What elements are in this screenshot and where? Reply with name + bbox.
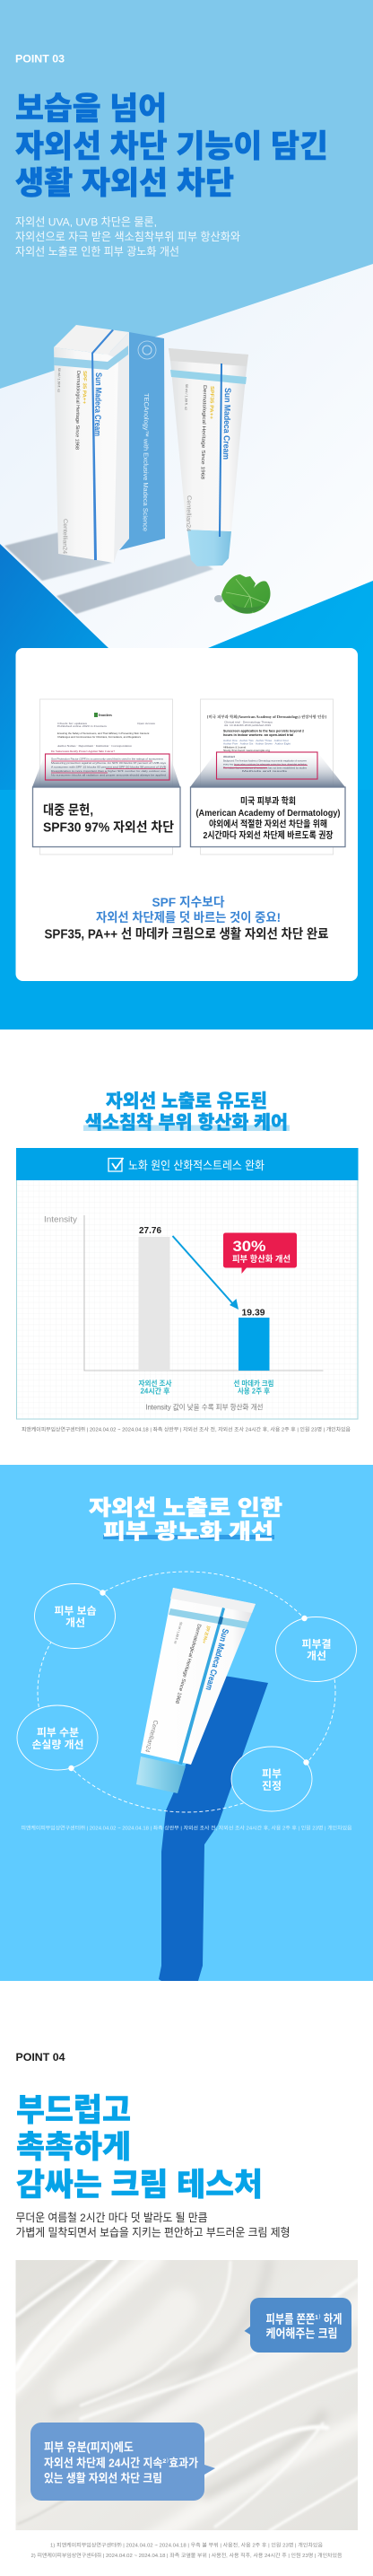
chart header: 노화 원인 산화적스트레스 완화 bbox=[128, 1159, 265, 1172]
bar chart bbox=[44, 1215, 323, 1411]
heading: 피부 광노화 개선 bbox=[103, 1520, 273, 1543]
zoom callout left highlight: No sunscreen blocks all radiation and proper amounts should always be applied bbox=[51, 774, 167, 777]
image: cream texture bbox=[16, 2260, 358, 2530]
document: AAD paper: Author One · Author Two · Author Three · Author Four bbox=[223, 739, 289, 742]
label: point 03: POINT 03 bbox=[15, 52, 65, 65]
description: 가볍게 밀착되면서 보습을 지키는 편안하고 부드러운 크림 제형 bbox=[16, 2226, 291, 2239]
product: tube: Centellian24 bbox=[185, 495, 192, 531]
heading: 자외선 노출로 인한 bbox=[89, 1495, 282, 1519]
footnote: 피앤케이피부임상연구센터㈜ | 2024.04.02 ~ 2024.04.18 | 좌측 상완부 | 자외선 조사 전, 자외선 조사 24시간 후, 사용 2주 후 | 인원 23명 | 개인차있음 bbox=[22, 1824, 351, 1831]
benefit: water loss: 손실량 개선 bbox=[32, 1739, 84, 1750]
callout: American Academy of Dermatology: (American Academy of Dermatology) bbox=[195, 809, 341, 819]
heading: 색소침착 부위 항산화 케어 bbox=[85, 1113, 288, 1133]
bar: after bbox=[239, 1309, 269, 1371]
document: frontiers paper: Check for updates bbox=[57, 722, 88, 725]
callout: 30% improvement bbox=[223, 1233, 297, 1274]
zoom callout right highlight: every two hours when outdoors for adequate protection from ultraviolet radiation bbox=[223, 763, 307, 767]
bar labels: 선 마데카 크림 bbox=[233, 1379, 274, 1388]
description: 자외선 노출로 인한 피부 광노화 개선 bbox=[15, 246, 179, 258]
callout: SPF30 97%: 대중 문헌, bbox=[43, 802, 93, 819]
footnotes bbox=[30, 2542, 343, 2559]
document: frontiers paper: Open Access bbox=[137, 722, 156, 725]
callout: 30% improvement: 30% bbox=[233, 1239, 266, 1255]
callout: 24 hour sun protection bbox=[30, 2423, 215, 2501]
chart header bbox=[16, 1148, 359, 1180]
document: frontiers paper: frontiers bbox=[99, 713, 112, 717]
product: tilted tube: SPF 35 PA++ bbox=[200, 1625, 211, 1644]
zoom callout right highlight: The indoor face persistence of sunscreen has not been established by studies bbox=[223, 767, 308, 770]
document: AAD paper: Clinical trial · Dermatology Therapy bbox=[224, 720, 273, 723]
callout: 24 hour sun protection: 자외선 차단제 24시간 지속²⁾효과가 bbox=[44, 2456, 198, 2470]
product: tube: Sun Madeca Cream bbox=[221, 388, 232, 460]
section: photoaging improvement bbox=[0, 1465, 373, 1981]
document: frontiers paper: Do Sunscreens Really Protect Against Skin Cancer? bbox=[51, 749, 116, 753]
headline bbox=[15, 92, 328, 201]
bar: before: 27.76 bbox=[139, 1226, 161, 1236]
document: AAD paper: Study first-hand: www.example.org bbox=[223, 749, 271, 752]
headline: 촉촉하게 bbox=[16, 2130, 131, 2165]
product: tube bbox=[169, 348, 248, 566]
product: carton box: TECAnology™ with Exclusive Madeca Science bbox=[142, 393, 151, 531]
callout: American Academy of Dermatology: 미국 피부과 학회 bbox=[240, 795, 296, 807]
document: AAD paper bbox=[201, 699, 334, 854]
document: frontiers paper bbox=[39, 699, 172, 854]
product: tube: 50 ml / 1.69 fl. oz bbox=[184, 384, 188, 410]
zoom callout right highlight: Background: The American Academy of Dermatology recommends reapplication of sunscreen bbox=[223, 759, 307, 763]
product: tilted tube: Centellian24 bbox=[143, 1719, 159, 1753]
section: point 03 hero bbox=[0, 0, 373, 1030]
zoom callout right highlight: Abstract bbox=[223, 755, 235, 758]
headline: 보습을 넘어 bbox=[15, 92, 167, 127]
benefit: skin texture bbox=[276, 1616, 357, 1682]
footnotes: 1) 피앤케이피부임상연구센터㈜ | 2024.04.02 ~ 2024.04.18 | 우측 볼 부위 | 사용전, 사용 2주 후 | 인원 23명 | 개인차있음 bbox=[50, 2542, 324, 2549]
callout: firm skin care: 케어해주는 크림 bbox=[265, 2326, 337, 2341]
headline: 자외선 차단 기능이 담긴 bbox=[15, 129, 328, 164]
arrow: decrease bbox=[172, 1236, 239, 1310]
description: 자외선으로 자극 받은 색소침착부위 피부 항산화와 bbox=[15, 231, 240, 243]
zoom callout left highlight: Reapplication is more important than a higher SPF number for daily outdoor use bbox=[51, 769, 167, 773]
callout: SPF30 97%: SPF30 97% 자외선 차단 bbox=[43, 820, 174, 835]
document: AAD paper: [미국 피부과 학회(American Academy of Dermatology) 권장사항 인용] bbox=[207, 714, 326, 719]
footnote: 피앤케이피부임상연구센터㈜ | 2024.04.02 ~ 2024.04.18 | 좌측 상완부 | 자외선 조사 전, 자외선 조사 24시간 후, 사용 2주 후 | 인원 23명 | 개인차있음 bbox=[22, 1425, 351, 1433]
heading bbox=[89, 1495, 282, 1543]
benefit: moisturizing bbox=[34, 1583, 115, 1648]
benefit: moisturizing: 개선 bbox=[65, 1617, 85, 1628]
callout: SPF30 97% bbox=[32, 787, 180, 847]
benefit: soothing: 피부 bbox=[262, 1768, 282, 1780]
benefit: skin texture: 개선 bbox=[307, 1650, 326, 1662]
conclusion text: 자외선 차단제를 덧 바르는 것이 중요! bbox=[96, 910, 281, 924]
panel: chart frame bbox=[16, 1148, 359, 1419]
benefit: water loss bbox=[17, 1705, 98, 1771]
callout: firm skin care bbox=[244, 2298, 351, 2353]
product: tilted tube: 50 ml / 1.69 fl. oz bbox=[173, 1622, 183, 1644]
bar labels: 24시간 후 bbox=[140, 1386, 170, 1395]
bar chart: Intensity bbox=[44, 1215, 77, 1224]
product: carton box: Sun Madeca Cream bbox=[92, 372, 103, 436]
zoom callout left highlight: Sun Protection Factor (SPF) is a commonly used that is used in the ratings of sunscreens bbox=[51, 758, 164, 761]
product: carton box: Dermatological Heritage Since 1968 bbox=[74, 371, 81, 450]
document: AAD paper: Sunscreen application to the face persists beyond 2 bbox=[223, 729, 304, 732]
callout: 24 hour sun protection: 피부 유분(피지)에도 bbox=[44, 2440, 134, 2454]
benefit cycle diagram bbox=[17, 1572, 357, 1812]
document: frontiers paper: Ensuring the Safety of Sunscreens, and Their Efficacy in Preventing Skin Cancers: bbox=[57, 732, 150, 735]
bar labels bbox=[138, 1379, 274, 1395]
description bbox=[16, 2212, 291, 2239]
zoom callout left highlight: A sunscreen with SPF 15 blocks 93 percent and SPF 50 blocks 98 percent of UVB bbox=[51, 765, 166, 768]
floor shadows bbox=[4, 532, 213, 614]
product: carton box: Centellian24 bbox=[61, 519, 68, 554]
conclusion text: SPF35, PA++ 선 마데카 크림으로 생활 자외선 차단 완료 bbox=[45, 926, 328, 942]
callout: American Academy of Dermatology: 2시간마다 자외선 차단제 바르도록 권장 bbox=[203, 829, 334, 841]
benefit: skin texture: 피부결 bbox=[301, 1639, 332, 1650]
product: tilted tube: Sun Madeca Cream bbox=[204, 1627, 230, 1691]
product: tilted tube: Dermatological Heritage Since 1968 bbox=[174, 1623, 202, 1704]
headline bbox=[16, 2093, 263, 2203]
benefit: water loss: 피부 수분 bbox=[37, 1727, 79, 1739]
footnotes: 2) 피앤케이피부임상연구센터㈜ | 2024.04.02 ~ 2024.04.18 | 좌측 코옆볼 부위 | 사용전, 사용 직후, 사용 24시간 후 | 인원 23명 | 개인차있음 bbox=[30, 2552, 343, 2559]
product: carton box: SPF 35 PA++ bbox=[81, 371, 87, 404]
description bbox=[15, 215, 240, 258]
chart note: Intensity 값이 낮을 수록 피부 항산화 개선 bbox=[145, 1402, 264, 1411]
document: AAD paper: Affiliations & Journal bbox=[223, 745, 246, 749]
document: frontiers paper: Published online 2023 in Frontiers bbox=[57, 724, 108, 728]
document: frontiers paper: Author Names · Department · Institution · Correspondence bbox=[57, 745, 133, 748]
bar labels: 사용 2주 후 bbox=[238, 1386, 270, 1395]
bar: before bbox=[138, 1226, 170, 1371]
heading bbox=[85, 1091, 288, 1133]
product: carton box: 50 ml / 1.69 fl. oz bbox=[57, 368, 61, 392]
headline: 부드럽고 bbox=[16, 2093, 131, 2128]
zoom callout right highlight bbox=[190, 752, 345, 787]
bar: after: 19.39 bbox=[242, 1309, 265, 1318]
product: tilted tube bbox=[136, 1588, 256, 1793]
zoom callout right highlight: Methods and results bbox=[242, 769, 288, 773]
headline: 감싸는 크림 테스처 bbox=[16, 2168, 263, 2203]
document: frontiers paper: Challenges and Controversies for Clinicians, Formulators, and Regulators bbox=[57, 735, 141, 739]
document: AAD paper: doi: 10.1111/dth.2019 published 2019 bbox=[224, 723, 272, 727]
document: AAD paper: hours in indoor workers: an open-label trial bbox=[223, 733, 293, 737]
bar labels: 자외선 조사 bbox=[138, 1379, 172, 1388]
highlight under heading bbox=[83, 1126, 290, 1131]
benefit: moisturizing: 피부 보습 bbox=[54, 1605, 97, 1617]
product: tube: SPF35 PA++ bbox=[208, 386, 214, 420]
section: antioxidant chart bbox=[0, 1030, 373, 1465]
callout: 30% improvement: 피부 항산화 개선 bbox=[232, 1254, 291, 1264]
description: 무더운 여름철 2시간 마다 덧 발라도 될 만큼 bbox=[16, 2212, 208, 2224]
tube shadow bbox=[159, 1676, 268, 1981]
heading: 자외선 노출로 유도된 bbox=[106, 1091, 267, 1111]
icon: centella leaf bbox=[214, 574, 271, 614]
product: tube: Dermatological Heritage Since 1968 bbox=[199, 385, 207, 479]
headline: 생활 자외선 차단 bbox=[15, 166, 234, 201]
benefit: soothing: 진정 bbox=[262, 1781, 282, 1792]
callout: American Academy of Dermatology bbox=[190, 787, 345, 847]
heading highlight bbox=[103, 1535, 274, 1539]
benefit: soothing bbox=[231, 1747, 312, 1811]
callout: American Academy of Dermatology: 야외에서 적절한 자외선 차단을 위해 bbox=[209, 819, 327, 829]
callout: firm skin care: 피부를 쫀쫀¹⁾ 하게 bbox=[265, 2312, 343, 2326]
callout: 24 hour sun protection: 있는 생활 자외선 차단 크림 bbox=[44, 2472, 162, 2484]
conclusion text bbox=[45, 895, 328, 942]
document: AAD paper: Author Five · Author Six · Author Seven · Author Eight bbox=[223, 741, 291, 745]
zoom callout left highlight bbox=[32, 754, 180, 787]
section: point 04 texture bbox=[16, 2054, 358, 2558]
conclusion text: SPF 지수보다 bbox=[152, 895, 225, 909]
product: carton box bbox=[54, 325, 165, 563]
description: 자외선 UVA, UVB 차단은 물론, bbox=[15, 215, 157, 228]
label: point 04: POINT 04 bbox=[16, 2051, 65, 2063]
zoom callout left highlight: Measuring protection against erythema. An SPF 30 blocks 97 percent of UVB rays bbox=[51, 761, 167, 765]
panel: evidence card bbox=[16, 648, 358, 981]
